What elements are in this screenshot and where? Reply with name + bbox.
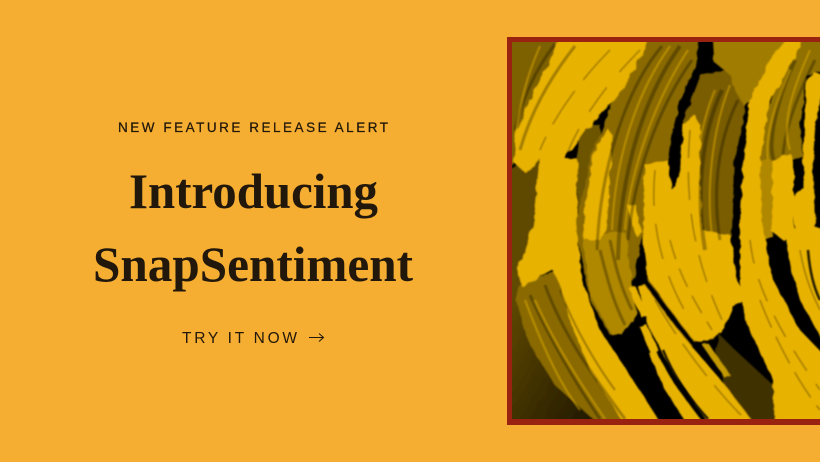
thin sweeping strokes bbox=[638, 285, 755, 425]
big centre stroke mass bbox=[643, 115, 748, 343]
kicker: new feature release alert: NEW FEATURE RELEASE ALERT bbox=[118, 120, 388, 135]
title: product name heading bbox=[93, 163, 413, 292]
dim and medium under-layers bbox=[512, 42, 559, 166]
brush streaks bbox=[515, 44, 820, 419]
title: product name heading: SnapSentiment bbox=[93, 236, 413, 292]
right bright band bbox=[740, 35, 820, 425]
image panel: abstract gold brush strokes in a red frame bbox=[505, 35, 820, 425]
bright band B bbox=[583, 128, 612, 240]
call to action: try it now with arrow: TRY IT NOW bbox=[182, 330, 297, 347]
title: product name heading: Introducing bbox=[129, 163, 378, 219]
bright band A bbox=[517, 155, 662, 425]
bright top-left patch bbox=[513, 35, 648, 174]
